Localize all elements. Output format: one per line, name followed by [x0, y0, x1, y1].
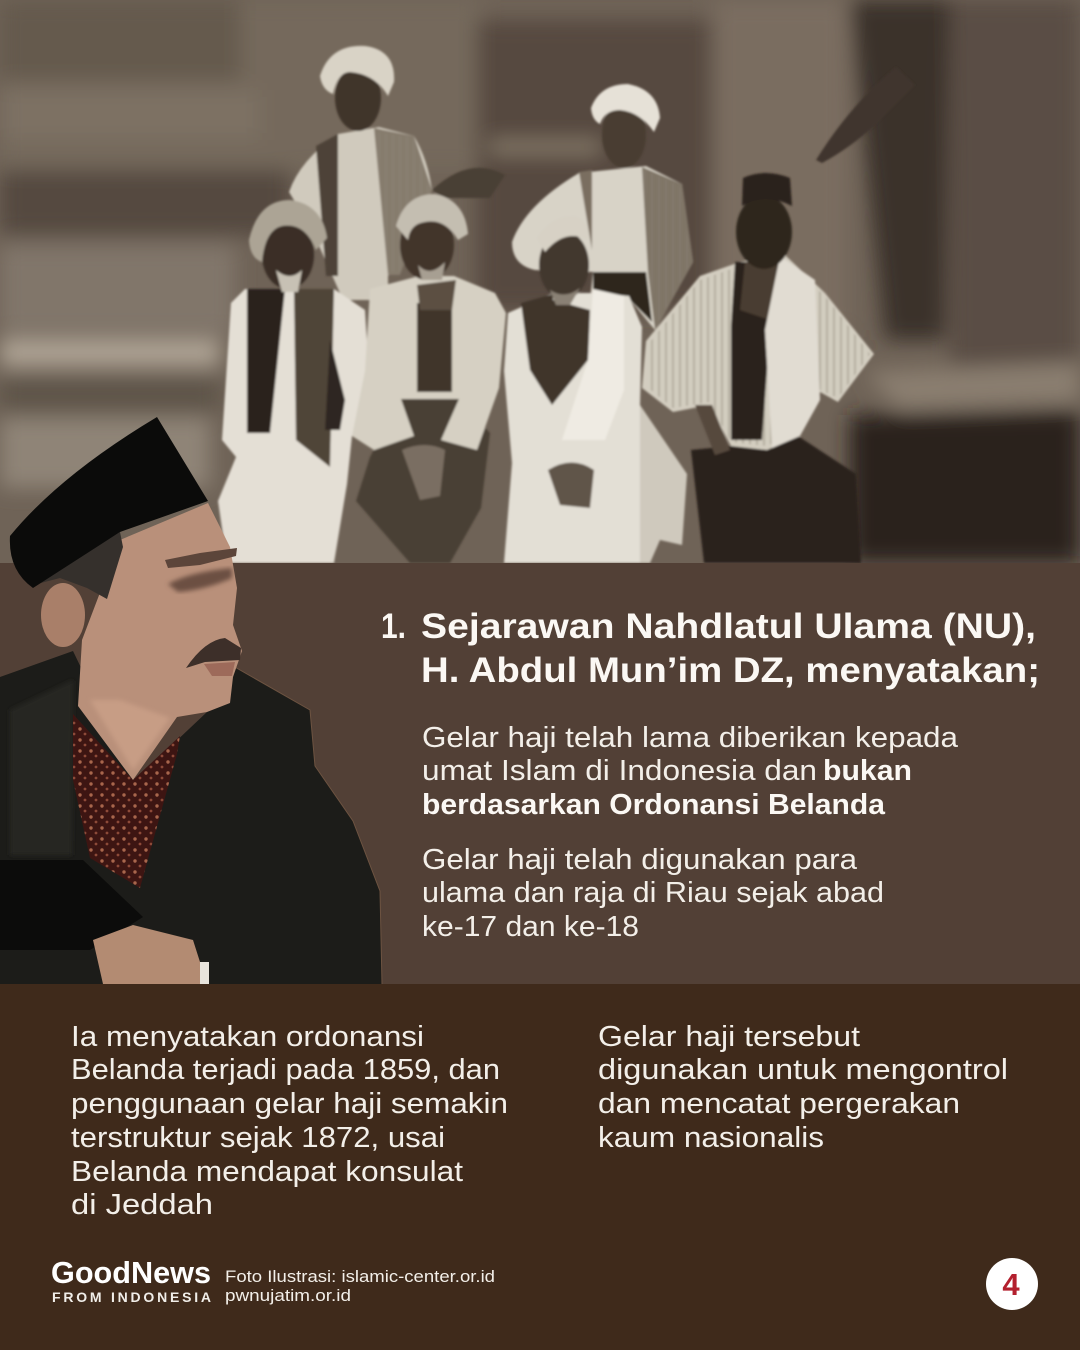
- portrait hand: [93, 925, 208, 984]
- text block: bottom right: digunakan untuk mengontrol: [598, 1054, 1008, 1086]
- figure: standing man left: [289, 46, 432, 300]
- portrait ear: [41, 583, 85, 647]
- photo credit: [225, 1268, 495, 1305]
- portrait neck and face: [78, 503, 242, 780]
- heading: [381, 607, 1040, 690]
- panel: dark brown bottom area: [0, 984, 1080, 1350]
- figure: seated man 2: [352, 194, 506, 563]
- text block: bottom left: di Jeddah: [71, 1189, 213, 1221]
- figure: seated man 1: [218, 200, 372, 563]
- heading: Sejarawan Nahdlatul Ulama (NU),: [421, 607, 1036, 646]
- portrait batik shirt: [73, 714, 180, 888]
- dark chair shape behind men: [432, 168, 505, 198]
- heading: H. Abdul Mun’im DZ, menyatakan;: [421, 651, 1040, 690]
- portrait shaded cheek: [90, 700, 170, 770]
- portrait hair: [37, 532, 123, 599]
- text block: bottom left: [71, 1021, 508, 1221]
- curtain fold: [816, 96, 872, 164]
- photo: group of hajj pilgrims: [0, 0, 1080, 563]
- figure: standing man right: [512, 84, 693, 330]
- text block: bottom left: terstruktur sejak 1872, usai: [71, 1122, 445, 1154]
- text block: paragraph one: Gelar haji telah lama diberikan kepada: [422, 722, 959, 754]
- portrait songkok cap: [10, 417, 208, 588]
- portrait cuff: [200, 962, 209, 984]
- heading: 1.: [381, 607, 406, 646]
- logo: GoodNews from Indonesia: GoodNews: [51, 1255, 211, 1290]
- text block: paragraph two: Gelar haji telah digunakan para: [422, 844, 858, 876]
- text block: paragraph two: ulama dan raja di Riau sejak abad: [422, 877, 884, 909]
- text block: paragraph one: [422, 722, 959, 821]
- photo credit: Foto Ilustrasi: islamic-center.or.id: [225, 1268, 495, 1286]
- text block: paragraph two: ke-17 dan ke-18: [422, 911, 639, 943]
- portrait lips: [204, 662, 235, 676]
- page number badge: [986, 1258, 1038, 1310]
- portrait moustache: [186, 638, 241, 668]
- logo: GoodNews from Indonesia: [51, 1255, 211, 1305]
- text block: bottom left: Belanda mendapat konsulat: [71, 1156, 463, 1188]
- portrait eye: [168, 568, 232, 592]
- panel: mid brown quote area: [0, 563, 1080, 984]
- text block: bottom left: penggunaan gelar haji semakin: [71, 1088, 508, 1120]
- portrait jacket rim: [233, 666, 382, 984]
- text block: bottom right: dan mencatat pergerakan: [598, 1088, 960, 1120]
- text block: paragraph two: [422, 844, 884, 943]
- text block: paragraph one: bukan: [823, 755, 912, 787]
- text block: bottom left: Belanda terjadi pada 1859, dan: [71, 1054, 500, 1086]
- text block: bottom right: kaum nasionalis: [598, 1122, 824, 1154]
- text block: paragraph one: umat Islam di Indonesia dan: [422, 755, 817, 787]
- portrait jacket lapel highlight: [10, 680, 73, 855]
- portrait sleeve shadow: [0, 860, 143, 950]
- text block: bottom right: Gelar haji tersebut: [598, 1021, 860, 1053]
- text block: bottom left: Ia menyatakan ordonansi: [71, 1021, 424, 1053]
- figure: seated man 4: [642, 173, 874, 563]
- text block: paragraph one: berdasarkan Ordonansi Belanda: [422, 789, 886, 821]
- portrait brow: [165, 548, 237, 568]
- portrait: H. Abdul Mun'im DZ: [0, 417, 382, 984]
- page number badge: 4: [1002, 1267, 1020, 1302]
- text block: bottom right: [598, 1021, 1008, 1154]
- photo credit: pwnujatim.or.id: [225, 1287, 351, 1305]
- figure: seated man 3: [504, 216, 687, 563]
- portrait jacket: [0, 651, 382, 984]
- logo: GoodNews from Indonesia: FROM INDONESIA: [52, 1289, 211, 1305]
